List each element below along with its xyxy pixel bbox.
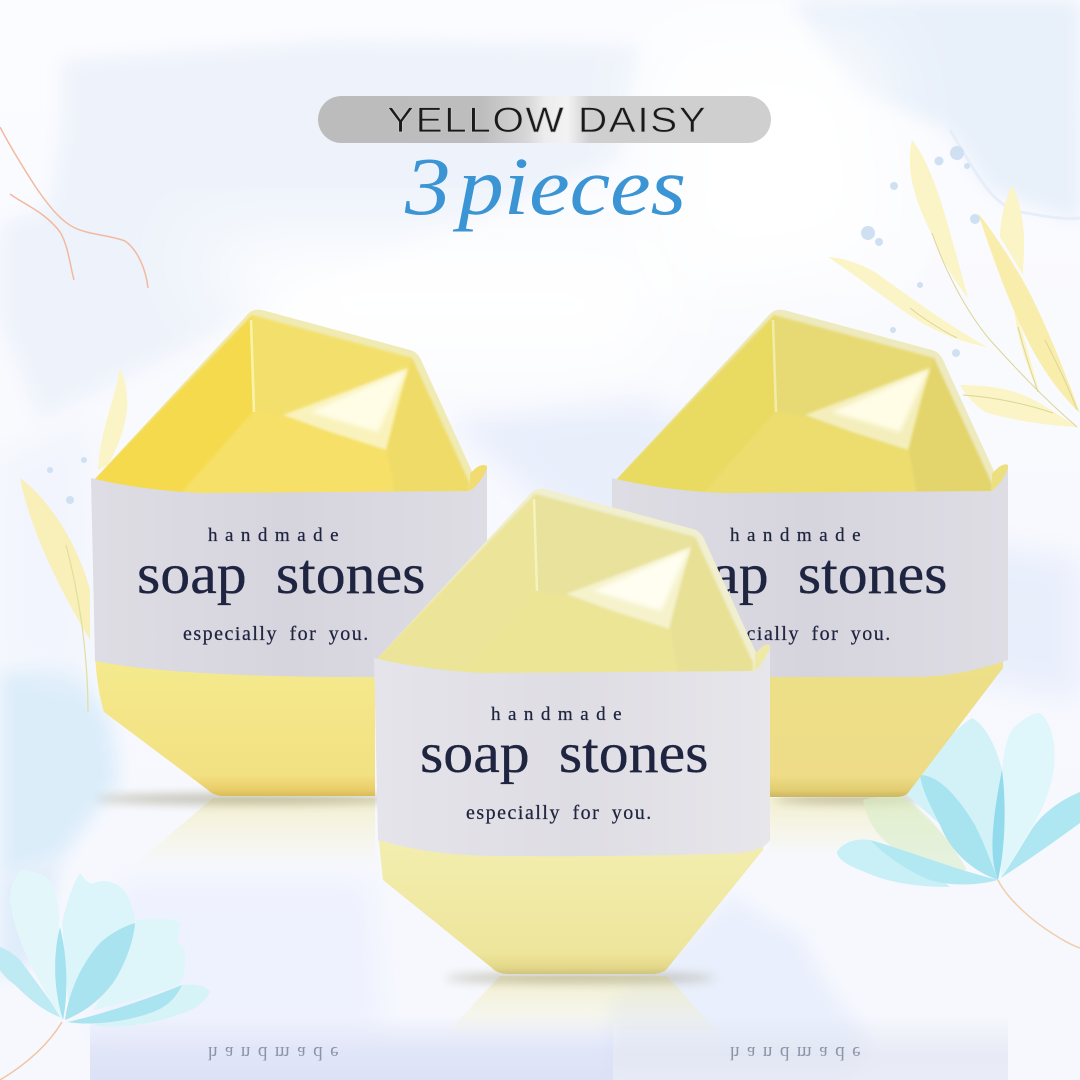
reflected label text right: handmade [730, 1042, 868, 1063]
decoration: yellow leaves left [20, 368, 127, 712]
label text: soap stones [137, 542, 425, 606]
label text: handmade [208, 525, 346, 546]
decoration: orange branch top left [0, 127, 148, 288]
label text: soap stones [420, 721, 708, 785]
label text [659, 525, 947, 645]
decoration: blue flower left [0, 870, 210, 1080]
decoration: yellow leaves right [828, 140, 1080, 427]
decoration: blue flower right [837, 713, 1080, 948]
subtitle: 3 pieces: 3 pieces [404, 140, 686, 232]
label text: especially for you. [705, 623, 892, 645]
soap: rear right [600, 300, 1010, 797]
label text [420, 704, 708, 824]
soap: rear left [80, 300, 490, 796]
title pill: YELLOW DAISY [318, 96, 771, 143]
label text: handmade [491, 704, 629, 725]
reflection: soap bases [90, 794, 1008, 1080]
label text: handmade [730, 525, 868, 546]
label text: especially for you. [183, 623, 370, 645]
soap: front center [365, 480, 775, 983]
reflected label text left: handmade [208, 1042, 346, 1063]
label text: especially for you. [466, 802, 653, 824]
label text [137, 525, 425, 645]
title pill: YELLOW DAISY: YELLOW DAISY [387, 102, 707, 140]
label text: soap stones [659, 542, 947, 606]
